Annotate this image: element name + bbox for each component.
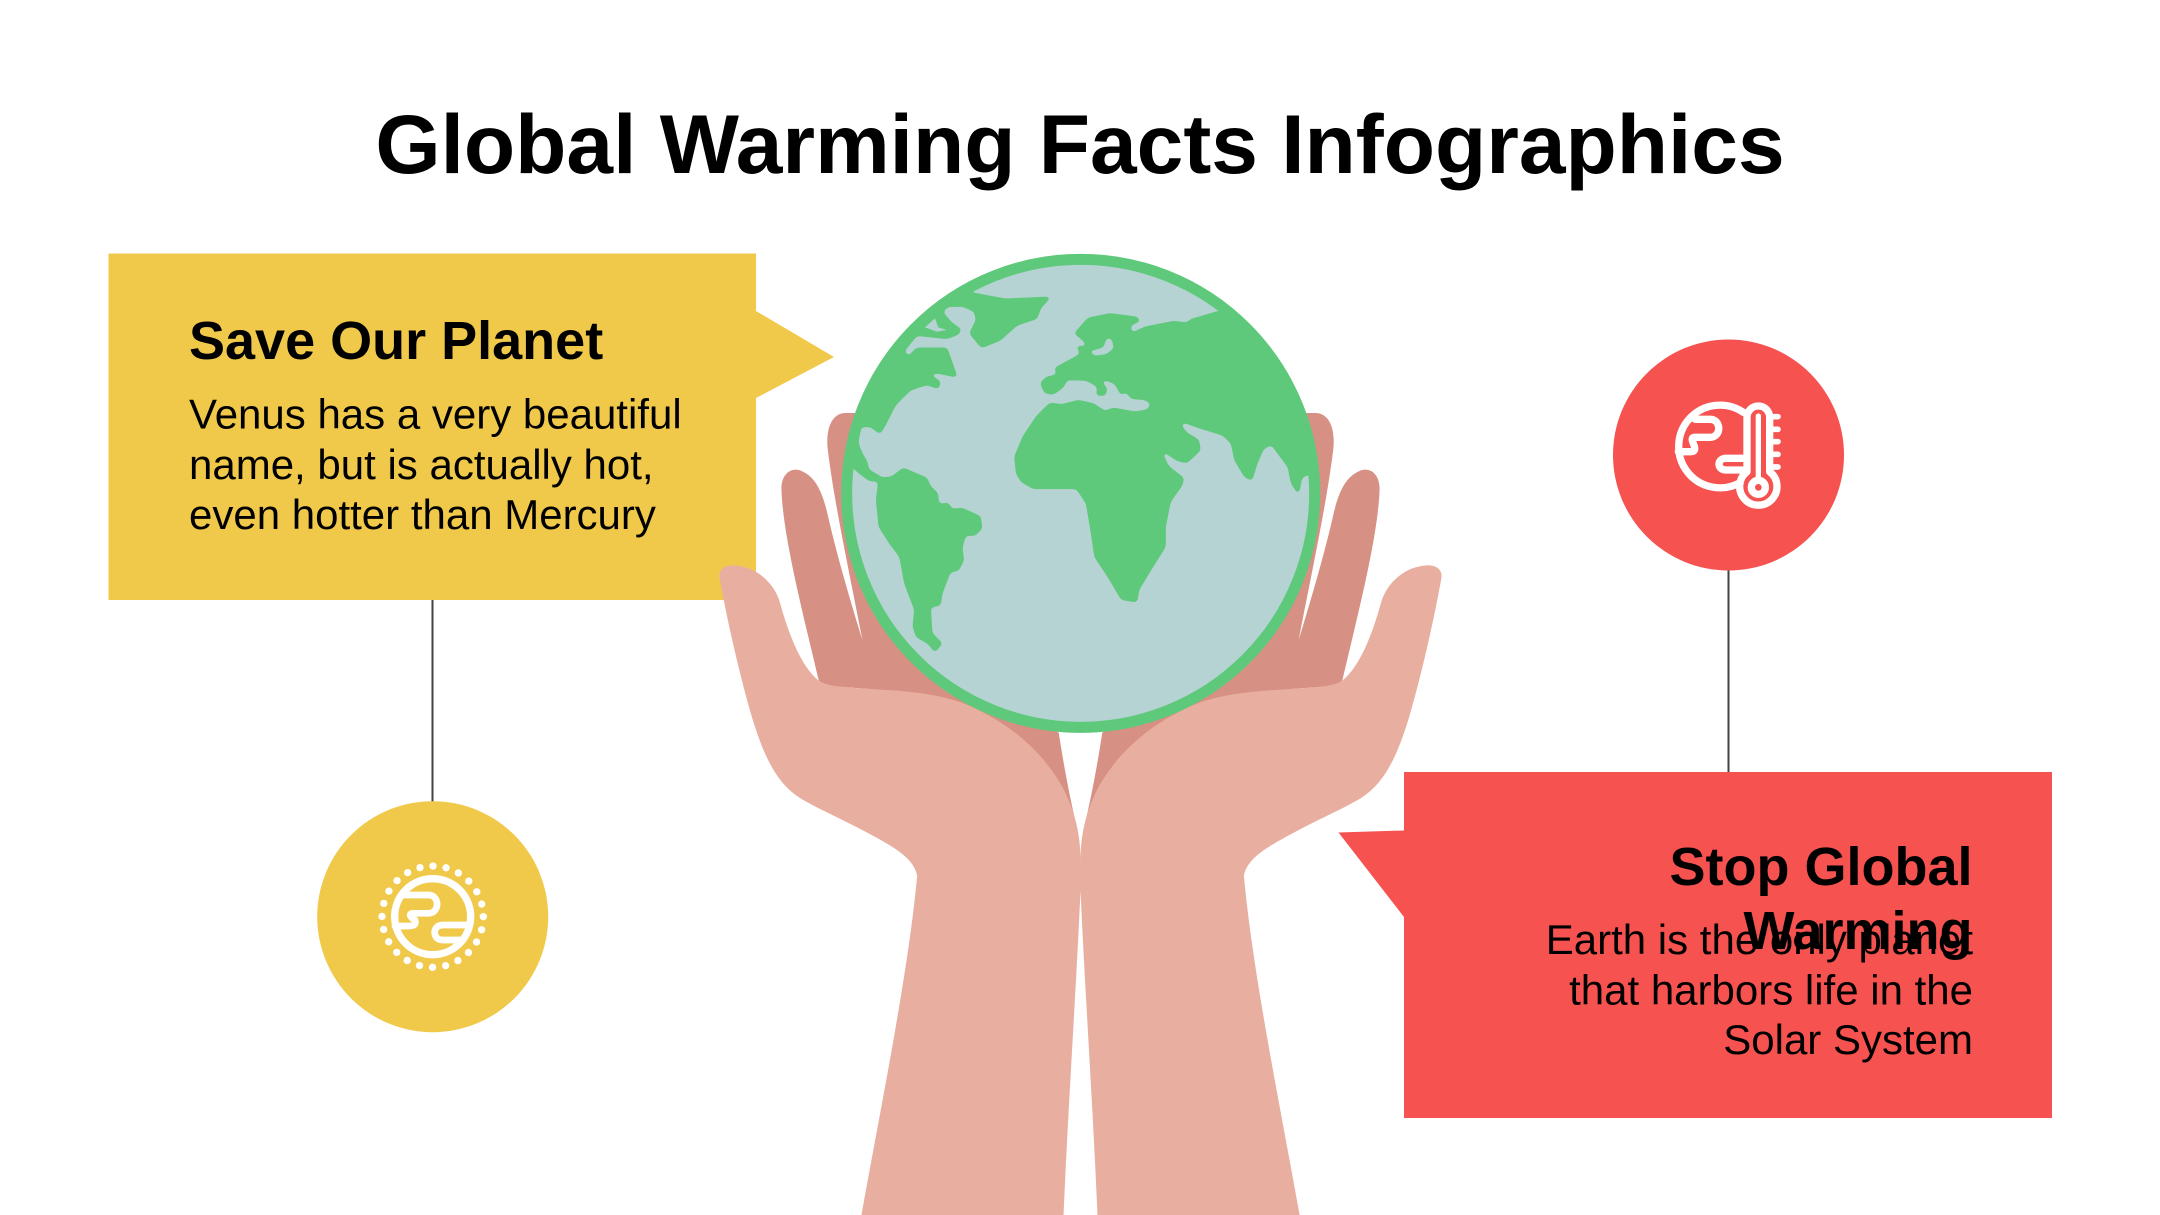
panel: save our planet	[108, 254, 834, 600]
body text: earth: Earth is the only planet	[1546, 916, 1973, 963]
yellow callout box	[108, 254, 834, 600]
right hand	[1081, 413, 1442, 1215]
panel: stop global warming	[1338, 772, 2052, 1118]
icon: red planet with thermometer	[1613, 340, 1844, 570]
body text: venus: name, but is actually hot,	[189, 441, 654, 488]
illustration: hands holding globe	[719, 259, 1442, 1215]
icon: yellow planet with sun dots	[317, 801, 548, 1032]
connector: yellow box to icon	[432, 600, 434, 802]
red callout box	[1338, 772, 2052, 1118]
body text: venus: even hotter than Mercury	[189, 491, 656, 538]
title: Global Warming Facts Infographics	[375, 97, 1785, 191]
left hand	[719, 413, 1081, 1215]
heading: save our planet: Save Our Planet	[189, 311, 603, 371]
globe	[840, 259, 1353, 727]
heading: stop global warming: Stop Global	[1670, 837, 1972, 897]
body text: earth: Solar System	[1723, 1016, 1973, 1063]
body text: earth: that harbors life in the	[1569, 966, 1973, 1014]
body text: venus: Venus has a very beautiful	[189, 390, 682, 438]
heading: stop global warming: Warming	[1744, 901, 1972, 961]
connector: red icon to box	[1728, 570, 1730, 773]
